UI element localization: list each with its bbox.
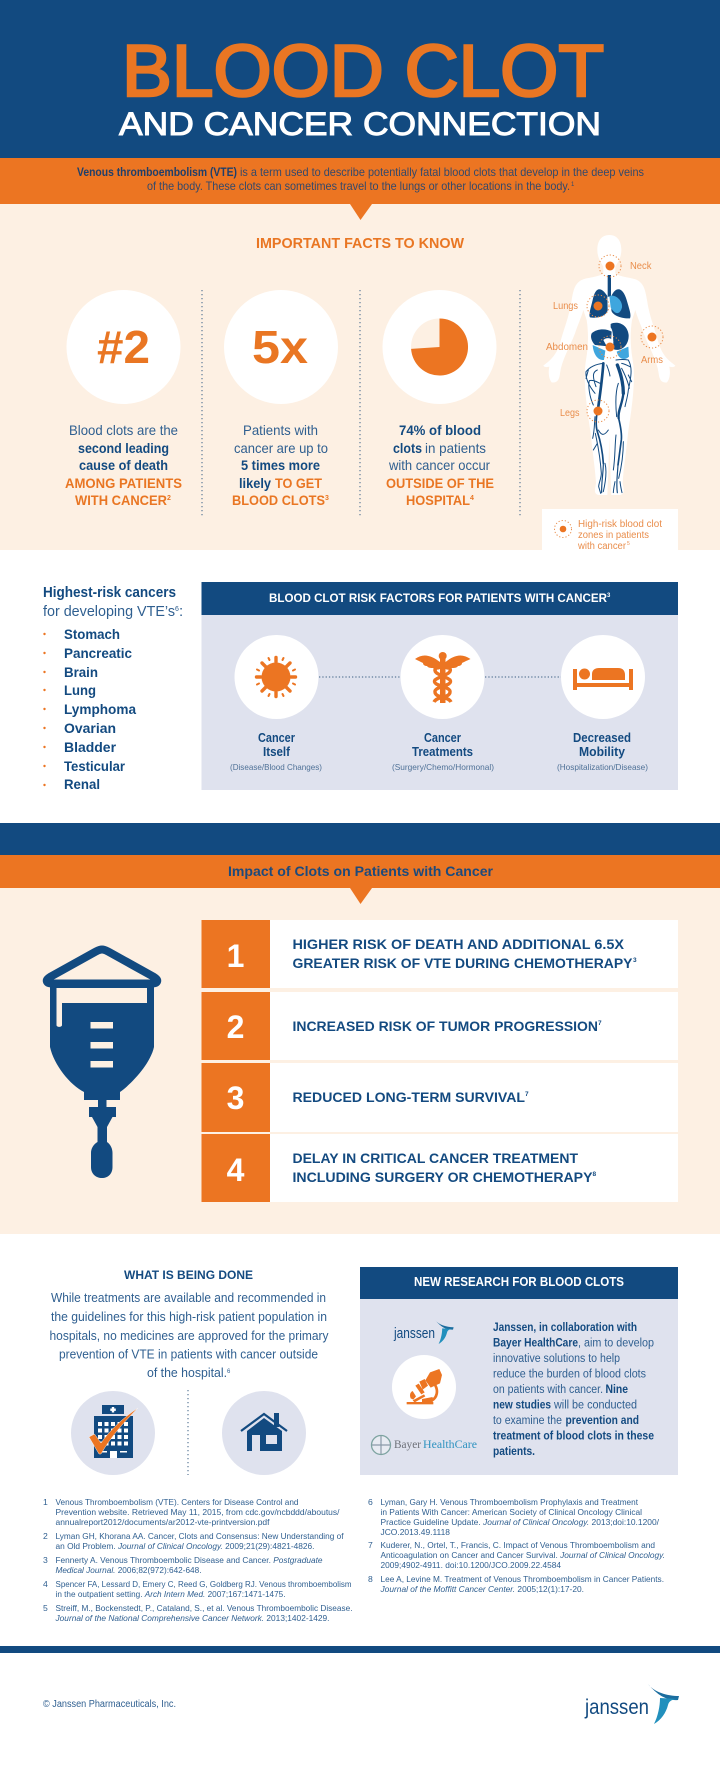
references: left column: Spencer FA, Lessard D, Emery C, Reed G, Goldberg RJ. Venous thromboembolism <box>56 1579 352 1589</box>
references: right column: in Patients With Cancer: American Society of Clinical Oncology Clinical <box>380 1507 642 1517</box>
icon: IV bag <box>47 950 157 1178</box>
marker: legs <box>560 400 609 422</box>
impact row 1: GREATER RISK OF VTE DURING CHEMOTHERAPY <box>292 956 632 971</box>
marker: legs: Legs <box>560 408 580 419</box>
cancer list: Brain <box>64 664 98 680</box>
references: left column: Journal of the National Comprehensive Cancer Network. 2013;1402-1429. <box>55 1613 330 1623</box>
references: left column: 2 <box>43 1531 48 1541</box>
text: what is being done: While treatments are available and recommended in <box>51 1291 326 1305</box>
marker: neck <box>599 255 652 277</box>
cancer list: Ovarian <box>64 720 116 736</box>
references: left column: Venous Thromboembolism (VTE). Centers for Disease Control and <box>56 1497 299 1507</box>
fact: 5 times more likely: cancer are up to <box>234 440 328 456</box>
references: left column: 3 <box>43 1555 48 1565</box>
fact: 5 times more likely: TO GET <box>275 475 322 491</box>
factor: cancer itself: Itself <box>263 745 291 759</box>
text: new research: Janssen, in collaboration with <box>493 1322 637 1334</box>
cancer list <box>43 626 136 792</box>
icon: hospital with check <box>71 1391 155 1475</box>
references: left column: annualreport2012/documents/ar2012-vte-printversion.pdf <box>56 1517 270 1527</box>
text: new research: to examine the <box>493 1415 562 1427</box>
impact row 2: 7 <box>598 1020 602 1027</box>
copyright: © Janssen Pharmaceuticals, Inc. <box>43 1699 176 1710</box>
impact row 3: 3 <box>227 1080 244 1116</box>
references: right column: Practice Guideline Update. Journal of Clinical Oncology. 2013;doi:10.1200/ <box>380 1517 660 1527</box>
text: what is being done <box>50 1291 329 1380</box>
logo: janssen: janssen <box>584 1696 649 1719</box>
icon: house <box>222 1391 306 1475</box>
fact: 74 percent outside hospital: in patients <box>425 440 486 456</box>
logo: janssen small: janssen <box>393 1325 435 1342</box>
heading: highest-risk cancers <box>43 584 183 620</box>
text: new research: new studies <box>493 1400 551 1412</box>
legend: high-risk zones: High-risk blood clot <box>578 519 662 530</box>
heading: highest-risk cancers: Highest-risk cancers <box>43 584 176 601</box>
text: new research: patients. <box>493 1446 535 1458</box>
heading: highest-risk cancers: 6 <box>175 606 179 613</box>
references: right column <box>368 1497 665 1594</box>
heading: new research: NEW RESEARCH FOR BLOOD CLOTS <box>414 1275 624 1289</box>
heading: important facts: IMPORTANT FACTS TO KNOW <box>256 235 465 252</box>
text: new research: treatment of blood clots in these <box>493 1430 654 1442</box>
text: what is being done: the guidelines for this high-risk patient population in <box>51 1310 327 1324</box>
marker: abdomen <box>546 336 621 358</box>
text: new research: , aim to develop <box>578 1338 654 1350</box>
text: new research <box>493 1322 654 1458</box>
logo: janssen small <box>393 1320 454 1344</box>
fact: 5 times more likely: Patients with <box>243 422 318 438</box>
fact: second leading cause: cause of death <box>79 457 168 473</box>
intro text: 1 <box>571 182 575 188</box>
factor: decreased mobility: Decreased <box>573 731 631 745</box>
legend: high-risk zones: with cancer <box>577 541 627 552</box>
references: right column: 7 <box>368 1540 373 1550</box>
impact row 4: DELAY IN CRITICAL CANCER TREATMENT <box>292 1151 579 1166</box>
panel: highest-risk cancers <box>43 584 183 792</box>
impact row 4: 4 <box>227 1152 245 1188</box>
fact: 74 percent outside hospital: HOSPITAL <box>406 492 470 508</box>
fact: 5 times more likely: 5x <box>252 321 308 373</box>
cancer list: Lymphoma <box>64 701 136 717</box>
panel: impact of clots <box>0 823 720 1234</box>
body silhouette and organs <box>543 235 675 495</box>
factor: cancer treatments: Treatments <box>412 745 473 759</box>
references: right column: Anticoagulation on Cancer and Cancer Survival. Journal of Clinical Oncology. <box>380 1550 665 1560</box>
factor: cancer treatments: Cancer <box>424 731 461 745</box>
fact: 5 times more likely: 3 <box>325 495 329 502</box>
logo: bayer healthcare: Bayer <box>394 1439 421 1451</box>
references: left column: 1 <box>43 1497 48 1507</box>
heading: highest-risk cancers: : <box>179 603 183 620</box>
references: left column: in the outpatient setting. Arch Intern Med. 2007;167:1471-1475. <box>56 1589 286 1599</box>
intro text: is a term used to describe potentially fatal blood clots that develop in the deep veins <box>240 166 644 179</box>
factor: cancer treatments: (Surgery/Chemo/Hormonal) <box>392 762 494 772</box>
panel: important facts <box>0 204 720 554</box>
marker: arms <box>641 326 663 366</box>
impact row 1: 3 <box>633 957 637 964</box>
references: left column: Prevention website. Retrieved May 11, 2015, from cdc.gov/ncbddd/aboutus/ <box>56 1507 340 1517</box>
fact: 5 times more likely: likely <box>239 475 271 491</box>
factor: cancer itself <box>230 635 322 772</box>
fact: 5 times more likely: BLOOD CLOTS <box>232 492 325 508</box>
legend: high-risk zones: zones in patients <box>578 530 649 541</box>
references: left column: Streiff, M., Bockenstedt, P., Cataland, S., et al. Venous Thromboembolic Disease. <box>56 1603 352 1613</box>
intro text: of the body. These clots can sometimes travel to the lungs or other locations in the body. <box>147 180 570 193</box>
icon: bed <box>573 668 633 690</box>
leg veins <box>586 359 632 493</box>
text: new research: reduce the burden of blood clots <box>493 1368 646 1380</box>
impact row 2: INCREASED RISK OF TUMOR PROGRESSION <box>292 1019 598 1034</box>
marker: lungs <box>553 295 609 317</box>
references: left column: an Old Problem. Journal of Clinical Oncology. 2009;21(29):4821-4826. <box>56 1541 314 1551</box>
fact: 74 percent outside hospital: with cancer occur <box>388 457 490 473</box>
icon: caduceus <box>415 652 470 703</box>
fact: second leading cause: AMONG PATIENTS <box>65 475 182 491</box>
legend: high-risk zones <box>542 509 678 554</box>
header band <box>0 0 720 158</box>
panel: risk factors <box>202 582 678 790</box>
logo: janssen <box>584 1684 679 1724</box>
icon: microscope <box>392 1355 456 1419</box>
references: right column: 8 <box>368 1574 373 1584</box>
impact row 3: REDUCED LONG-TERM SURVIVAL <box>292 1090 525 1105</box>
factor: decreased mobility <box>557 635 648 772</box>
text: new research: on patients with cancer. <box>493 1384 603 1396</box>
title: AND CANCER CONNECTION <box>119 106 601 142</box>
cancer list: Renal <box>64 776 100 792</box>
risk factors heading: BLOOD CLOT RISK FACTORS FOR PATIENTS WITH CANCER <box>269 591 607 605</box>
text: what is being done: 6 <box>227 1369 231 1375</box>
references: right column: Lyman, Gary H. Venous Thromboembolism Prophylaxis and Treatment <box>380 1497 639 1507</box>
marker: abdomen: Abdomen <box>546 342 588 353</box>
references: right column: 6 <box>368 1497 373 1507</box>
text: new research: Nine <box>606 1384 628 1396</box>
marker: lungs: Lungs <box>553 301 578 312</box>
impact row 4: INCLUDING SURGERY OR CHEMOTHERAPY <box>292 1170 592 1185</box>
pie chart: 74 percent <box>411 318 468 376</box>
title: BLOOD CLOT <box>122 31 604 112</box>
cancer list: Lung <box>64 682 96 698</box>
impact row 1: HIGHER RISK OF DEATH AND ADDITIONAL 6.5X <box>292 937 624 952</box>
references: left column: Fennerty A. Venous Thromboembolic Disease and Cancer. Postgraduate <box>56 1555 323 1565</box>
references: left column: Lyman GH, Khorana AA. Cancer, Clots and Consensus: New Understanding of <box>56 1531 344 1541</box>
references: right column: Lee A, Levine M. Treatment of Venous Thromboembolism in Cancer Patients. <box>380 1574 664 1584</box>
factor: cancer itself: Cancer <box>258 731 295 745</box>
cancer list: Stomach <box>64 626 120 642</box>
text: what is being done: hospitals, no medicines are approved for the primary <box>50 1329 329 1343</box>
logo: bayer healthcare: HealthCare <box>423 1439 477 1451</box>
impact row 3: 7 <box>525 1091 529 1098</box>
marker: arms: Arms <box>641 355 663 366</box>
fact: 74 percent outside hospital <box>382 290 496 508</box>
references: right column: Kuderer, N., Ortel, T., Francis, C. Impact of Venous Thromboembolism and <box>380 1540 655 1550</box>
fact: 5 times more likely <box>224 290 338 508</box>
references: right column: Journal of the Moffitt Cancer Center. 2005;12(1):17-20. <box>380 1584 584 1594</box>
marker: neck: Neck <box>630 261 652 272</box>
factor: decreased mobility: (Hospitalization/Disease) <box>557 762 648 772</box>
references: right column: 2009;4902-4911. doi:10.1200/JCO.2009.22.4584 <box>380 1560 561 1570</box>
cancer list: Pancreatic <box>64 645 132 661</box>
references: left column: 5 <box>43 1603 48 1613</box>
body diagram <box>543 235 675 495</box>
cancer list: Bladder <box>64 739 117 755</box>
impact row 2: 2 <box>227 1009 244 1045</box>
fact: second leading cause: second leading <box>78 440 169 456</box>
text: new research: Bayer HealthCare <box>493 1338 578 1350</box>
text: new research: prevention and <box>566 1415 639 1427</box>
heading: highest-risk cancers: for developing VTE’s <box>43 603 175 620</box>
references: right column: JCO.2013.49.1118 <box>380 1527 450 1537</box>
fact: second leading cause: #2 <box>97 321 150 373</box>
impact row 4 <box>202 1134 678 1202</box>
intro band <box>0 158 720 204</box>
text: what is being done: of the hospital. <box>147 1366 227 1380</box>
impact row 1: 1 <box>227 938 244 974</box>
impact row 4: 8 <box>592 1171 596 1178</box>
intro text <box>77 166 644 193</box>
fact: second leading cause: Blood clots are the <box>69 422 178 438</box>
references: left column: 4 <box>43 1579 48 1589</box>
references: left column: Medical Journal. 2006;82(972):642-648. <box>56 1565 202 1575</box>
impact row 1 <box>202 920 678 988</box>
panel: new research <box>360 1267 678 1475</box>
fact: second leading cause: 2 <box>167 495 171 502</box>
factor: decreased mobility: Mobility <box>579 745 625 759</box>
cancer list: Testicular <box>64 758 126 774</box>
factor: cancer treatments <box>392 635 494 772</box>
legend: high-risk zones: 5 <box>627 541 630 547</box>
fact: second leading cause <box>65 290 182 508</box>
heading: impact of clots: Impact of Clots on Patients with Cancer <box>228 864 494 879</box>
heading: what is being done: WHAT IS BEING DONE <box>124 1270 253 1282</box>
text: new research: will be conducted <box>553 1400 637 1412</box>
impact row 3 <box>202 1063 678 1132</box>
fact: 5 times more likely: 5 times more <box>241 457 320 473</box>
fact: second leading cause: WITH CANCER <box>75 492 167 508</box>
references: left column <box>43 1497 352 1623</box>
text: new research: innovative solutions to help <box>493 1353 620 1365</box>
logo: bayer healthcare <box>372 1436 477 1454</box>
risk factors heading: 3 <box>607 593 611 599</box>
fact: 74 percent outside hospital: 74% of blood <box>399 422 481 438</box>
impact row 2 <box>202 992 678 1060</box>
fact: 74 percent outside hospital: 4 <box>470 495 474 502</box>
fact: 74 percent outside hospital: clots <box>393 440 422 456</box>
text: what is being done: prevention of VTE in patients with cancer outside <box>59 1348 318 1362</box>
factor: cancer itself: (Disease/Blood Changes) <box>230 762 322 772</box>
icon: cancer cell <box>256 658 296 696</box>
panel: what is being done <box>50 1270 329 1475</box>
fact: 74 percent outside hospital: OUTSIDE OF THE <box>386 475 494 491</box>
intro text: Venous thromboembolism (VTE) <box>77 166 237 179</box>
